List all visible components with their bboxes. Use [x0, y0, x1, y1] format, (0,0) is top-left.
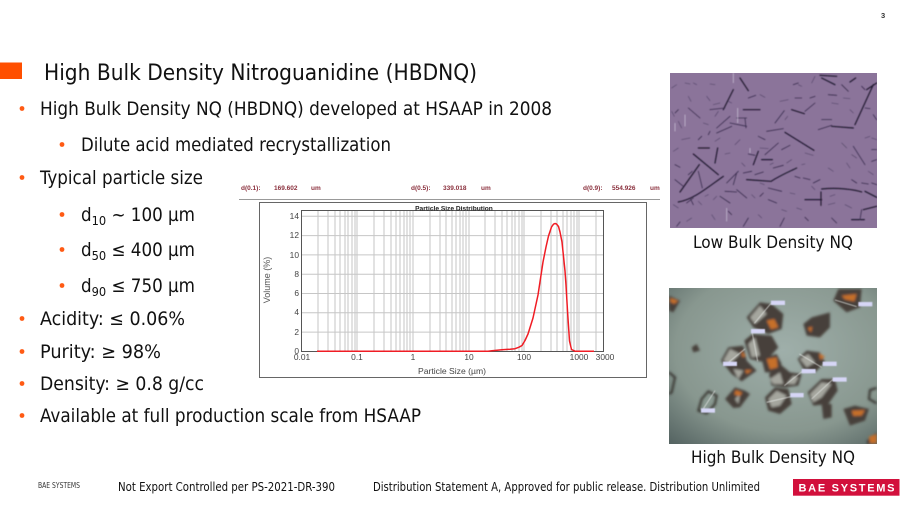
bullet: d50 — [60, 240, 195, 263]
bullet: particle size: Typical particle size — [39, 168, 203, 189]
particle size results row: 339.018 — [443, 185, 467, 192]
BAE Systems logo: BAE SYSTEMS — [798, 482, 894, 494]
y axis labels: 0 — [294, 346, 299, 356]
x axis labels: 0.1 — [351, 352, 363, 362]
footer distribution statement: Distribution Statement A, Approved for public release. Distribution Unlimited — [373, 480, 760, 494]
bullet: d90: d — [81, 276, 91, 297]
particle size results row: d(0.9): — [583, 185, 602, 192]
bullet: d90: ≤ 750 µm — [106, 276, 195, 297]
bullet: d50: d — [81, 240, 91, 261]
measurement lines and tags — [701, 300, 872, 413]
caption: low bulk density: Low Bulk Density NQ — [693, 233, 853, 252]
bullet: d50: ≤ 400 µm — [106, 240, 195, 261]
photo: low bulk density NQ needles — [670, 73, 877, 228]
caption: high bulk density: High Bulk Density NQ — [691, 448, 855, 467]
y axis labels: 2 — [294, 327, 299, 337]
chart plot area — [302, 211, 604, 351]
footer export control statement: Not Export Controlled per PS-2021-DR-390 — [118, 480, 335, 494]
bullet list — [20, 99, 552, 427]
y axis labels: 12 — [290, 230, 299, 240]
y axis labels: 6 — [294, 288, 299, 298]
bullet: density: Density: ≥ 0.8 g/cc — [40, 374, 204, 395]
x axis labels — [294, 352, 615, 362]
particle size results row: 554.926 — [612, 185, 636, 192]
footer small company name: BAE SYSTEMS — [38, 481, 80, 490]
bullet: acidity: Acidity: ≤ 0.06% — [40, 309, 185, 330]
bullet: availability: Available at full production scale from HSAAP — [40, 406, 421, 427]
title marker — [0, 62, 22, 79]
bullet: recrystallization: Dilute acid mediated recrystallization — [81, 135, 391, 156]
x axis labels: 0.01 — [294, 352, 310, 362]
crystals orange glints — [670, 294, 877, 443]
bullet: developed: High Bulk Density NQ (HBDNQ) developed at HSAAP in 2008 — [40, 99, 552, 120]
particle size results row: d(0.1): — [241, 185, 260, 192]
bullet: d10: d — [81, 205, 91, 226]
bullet: d10: ~ 100 µm — [106, 205, 195, 226]
particle size results row: um — [650, 185, 660, 192]
bullet: d90: 90 — [92, 284, 106, 299]
x axis labels: 100 — [517, 352, 531, 362]
bullet: d50: 50 — [92, 248, 106, 263]
bullet: d90 — [60, 276, 195, 299]
x axis labels: 3000 — [596, 352, 615, 362]
x axis labels: 1000 — [570, 352, 589, 362]
y axis labels: 4 — [294, 307, 299, 317]
x axis labels: 10 — [464, 352, 474, 362]
bullet: d10: 10 — [92, 213, 106, 228]
outline crystals — [669, 372, 877, 413]
particle size results row: 169.602 — [274, 185, 298, 192]
chart: particle size distribution — [260, 202, 646, 378]
distribution curve — [317, 224, 594, 351]
y axis labels: 10 — [290, 250, 299, 260]
particle size results row — [239, 185, 660, 200]
x axis labels: 1 — [411, 352, 416, 362]
page number: 3 — [881, 11, 885, 20]
bullet: purity: Purity: ≥ 98% — [40, 342, 161, 363]
y axis labels: 8 — [294, 269, 299, 279]
y axis labels — [290, 211, 299, 356]
crystals dark bodies — [669, 289, 877, 444]
title: High Bulk Density Nitroguanidine (HBDNQ) — [44, 60, 477, 86]
photo: high bulk density NQ crystals — [669, 288, 877, 444]
bullet: d10 — [60, 205, 195, 228]
particle size results row: d(0.5): — [411, 185, 430, 192]
chart title: Particle Size Distribution — [415, 206, 493, 212]
x axis title: Particle Size (µm) — [418, 366, 486, 376]
BAE Systems logo — [793, 479, 900, 496]
particle size results row: um — [481, 185, 491, 192]
particle size results row: um — [311, 185, 321, 192]
crystals grey faces — [723, 306, 832, 407]
y axis labels: 14 — [290, 211, 299, 221]
y axis title: Volume (%) — [262, 257, 272, 303]
